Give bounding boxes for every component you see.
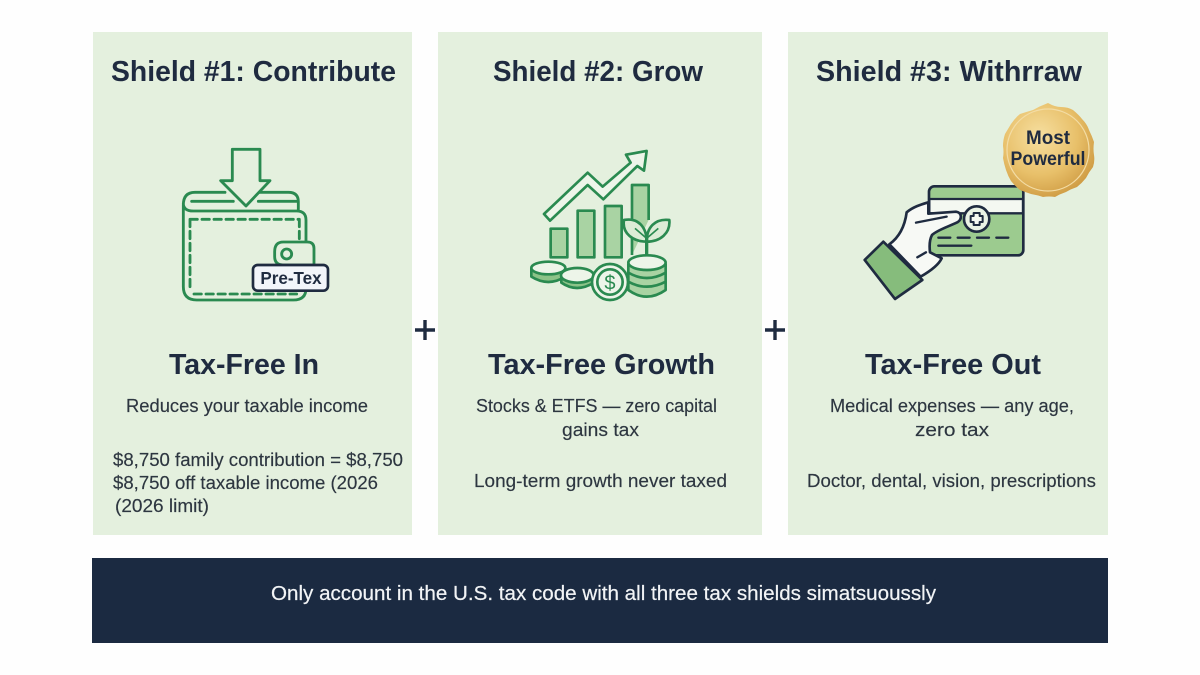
text: reduces taxable income: Reduces your taxable income bbox=[126, 396, 368, 416]
panel: shield 3 withdraw bbox=[788, 32, 1108, 535]
heading: shield 2: Shield #2: Grow bbox=[493, 56, 703, 88]
text: doctor dental vision: Doctor, dental, vision, prescriptions bbox=[807, 471, 1096, 491]
panel: shield 1 contribute bbox=[93, 32, 412, 535]
text: medical expenses: Medical expenses — any age, bbox=[830, 396, 1074, 416]
text: medical expenses: zero tax bbox=[915, 420, 989, 440]
text: stocks and etfs bbox=[476, 396, 717, 440]
label: Pre-Tex: Pre-Tex bbox=[260, 268, 322, 288]
banner: bottom statement: Only account in the U.S. tax code with all three tax shields simatsuoussly bbox=[271, 583, 936, 605]
text: family contribution: $8,750 family contribution = $8,750 bbox=[113, 450, 403, 470]
icon: wallet with down arrow bbox=[183, 149, 328, 300]
heading: shield 3: Shield #3: Withrraw bbox=[816, 56, 1082, 88]
icon: growth chart with coins and plant: $ bbox=[604, 272, 616, 294]
banner: bottom statement bbox=[92, 558, 1108, 643]
badge: most powerful: Powerful bbox=[1010, 149, 1086, 170]
text: family contribution: (2026 limit) bbox=[115, 496, 209, 516]
text: stocks and etfs: Stocks & ETFS — zero capital bbox=[476, 396, 717, 416]
icon: growth chart with coins and plant bbox=[531, 151, 669, 300]
icon: hand holding medical card bbox=[865, 186, 1023, 299]
text: stocks and etfs: gains tax bbox=[562, 420, 639, 440]
text: family contribution bbox=[113, 450, 403, 516]
panel: shield 2 grow bbox=[438, 32, 762, 535]
badge: most powerful bbox=[1003, 103, 1094, 197]
text: long-term growth: Long-term growth never taxed bbox=[474, 471, 727, 491]
badge: most powerful: Most bbox=[1026, 128, 1071, 149]
text: family contribution: $8,750 off taxable income (2026 bbox=[113, 473, 378, 493]
icon: plus sign 1 bbox=[415, 320, 435, 340]
heading: shield 1: Shield #1: Contribute bbox=[111, 56, 396, 88]
subheading: tax-free in: Tax-Free In bbox=[169, 349, 319, 381]
icon: plus sign 2 bbox=[765, 320, 785, 340]
text: medical expenses bbox=[830, 396, 1074, 440]
subheading: tax-free growth: Tax-Free Growth bbox=[488, 349, 715, 381]
label: Pre-Tex bbox=[253, 265, 328, 291]
subheading: tax-free out: Tax-Free Out bbox=[865, 349, 1041, 381]
